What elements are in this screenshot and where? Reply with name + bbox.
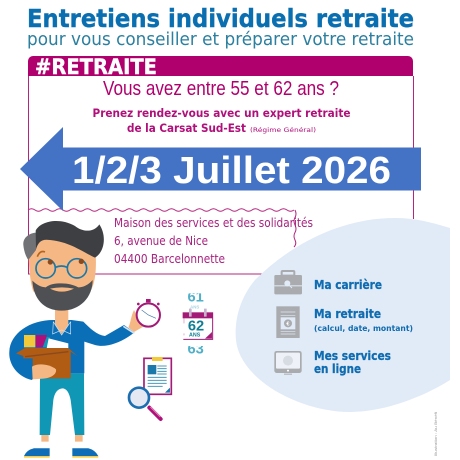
torso and arms xyxy=(9,320,134,380)
handwritten question: Vous avez entre 55 et 62 ans ? xyxy=(103,78,339,100)
eyes xyxy=(48,259,53,265)
box fold xyxy=(25,352,68,357)
shoe soles xyxy=(24,456,98,458)
cardboard box xyxy=(16,348,77,378)
subtitle: pour vous conseiller et préparer votre retraite xyxy=(27,29,414,50)
label: mes services en ligne xyxy=(314,349,391,376)
legs xyxy=(40,373,84,435)
address block: 04400 Barcelonnette xyxy=(114,251,225,266)
call to action: (Régime Général) xyxy=(250,126,316,134)
stopwatch xyxy=(137,299,160,327)
beard xyxy=(32,280,93,311)
icon: calendar 61 62 63: 61 xyxy=(187,290,204,306)
hashtag heading: #RETRAITE xyxy=(35,55,157,79)
address block xyxy=(114,215,313,266)
teal tab xyxy=(43,337,50,347)
icon: retirement document: € xyxy=(286,321,290,327)
cuff xyxy=(123,326,134,333)
label: mes services en ligne: Mes services xyxy=(314,349,391,363)
call to action: de la Carsat Sud-Est xyxy=(127,121,246,135)
header band xyxy=(28,56,413,76)
icon: briefcase xyxy=(274,271,302,294)
icon: calendar 61 62 63 xyxy=(183,290,213,357)
arrow banner with date: 1/2/3 Juillet 2026 xyxy=(72,150,391,192)
address block: 6, avenue de Nice xyxy=(114,233,208,248)
services list xyxy=(274,271,413,376)
white sheet xyxy=(47,338,68,348)
hand on box xyxy=(32,364,56,379)
mouth xyxy=(50,287,74,292)
face xyxy=(28,235,96,292)
glasses xyxy=(36,259,87,278)
title: Entretiens individuels retraite xyxy=(27,4,414,33)
illustration credit: Illustration : Au Bénéfi xyxy=(434,412,438,456)
label: ma retraite xyxy=(314,307,413,333)
file magenta xyxy=(36,335,47,347)
icon: calendar 61 62 63: 62 xyxy=(188,319,204,335)
raised hand xyxy=(128,310,143,332)
hair xyxy=(36,221,104,258)
arrow banner with date xyxy=(20,127,421,211)
illustration: man holding box and stopwatch xyxy=(9,221,160,458)
call to action: Prenez rendez-vous avec un expert retraite xyxy=(92,106,351,120)
address block: Maison des services et des solidarités xyxy=(114,215,313,230)
icon: calendar 61 62 63: ANS xyxy=(189,333,201,339)
wavy address frame xyxy=(28,209,296,247)
label: ma retraite: (calcul, date, montant) xyxy=(314,324,413,333)
icon: calendar 61 62 63: 63 xyxy=(187,341,204,357)
icon: document with magnifier xyxy=(129,357,171,419)
panel: services blob xyxy=(236,218,450,412)
panel: outlined card frame xyxy=(28,76,414,274)
neck xyxy=(55,308,68,334)
label: mes services en ligne: en ligne xyxy=(314,362,361,376)
side hair xyxy=(23,233,36,260)
ankles xyxy=(41,435,83,442)
icon: online monitor xyxy=(274,351,302,375)
shoes xyxy=(24,448,98,456)
eyebrow xyxy=(37,252,45,257)
label: ma retraite: Ma retraite xyxy=(314,307,381,321)
call to action xyxy=(92,106,351,135)
collar xyxy=(53,322,71,335)
icon: calendar 61 62 63: ANS xyxy=(190,304,199,309)
label: ma carriere: Ma carrière xyxy=(314,278,382,292)
file yellow xyxy=(24,335,35,347)
